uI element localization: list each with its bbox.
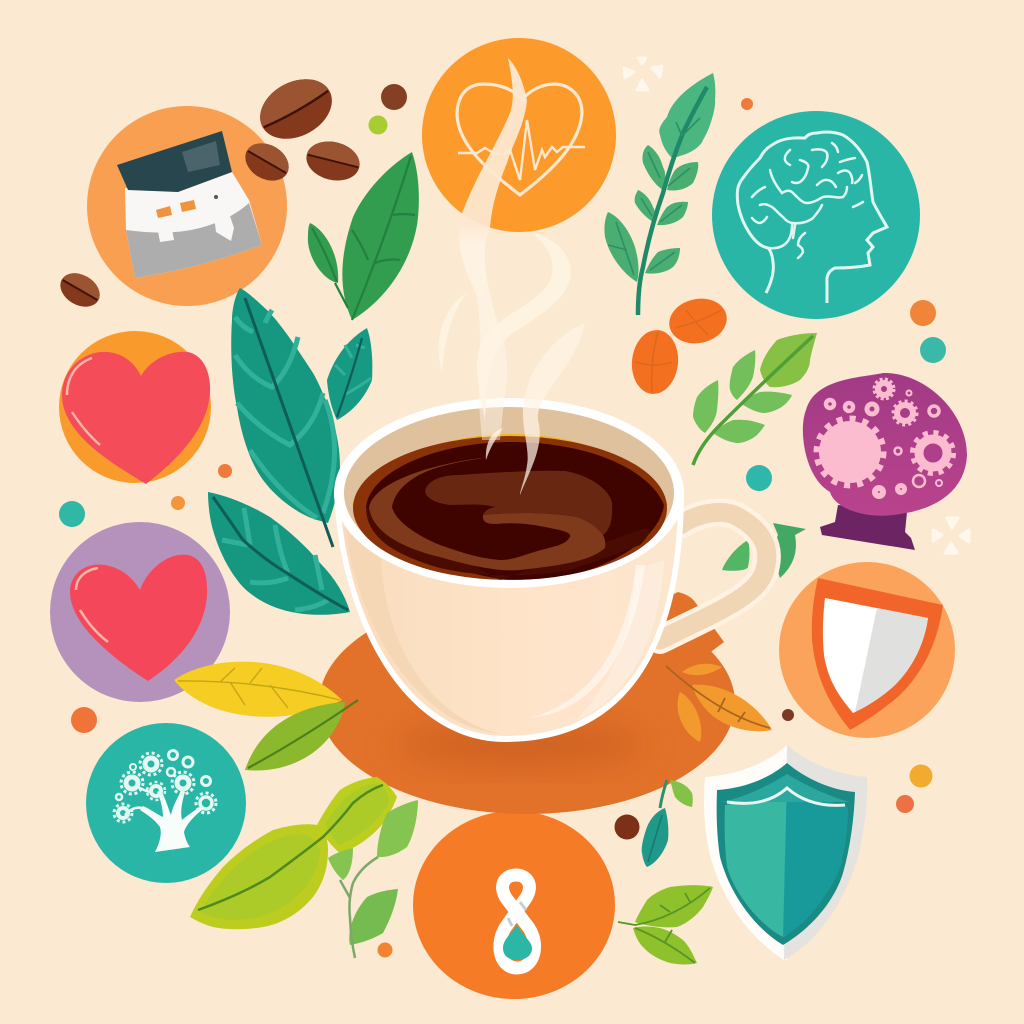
icon: green sprig bottom bbox=[328, 800, 418, 958]
icon: green leaves bottom bbox=[618, 885, 713, 964]
icon: leaf sprig right bbox=[693, 333, 817, 465]
large gear bbox=[817, 419, 883, 485]
icon: sprig with brown dot bbox=[614, 780, 693, 867]
panel: heart on orange circle bbox=[59, 331, 211, 484]
panel: purple brain with gears bbox=[803, 373, 967, 550]
panel: orange circle with infinity drop bbox=[413, 811, 615, 999]
panel: heart rate circle bbox=[422, 38, 616, 232]
steam bbox=[439, 58, 585, 495]
icon: autumn leaves on saucer bbox=[666, 664, 772, 742]
icon: lower teal leaf bbox=[208, 492, 350, 615]
panel: heart on purple circle bbox=[50, 522, 230, 702]
panel: shield circle bbox=[779, 562, 955, 738]
icon: yellow and green leaves bbox=[174, 662, 358, 771]
icon: coffee beans bbox=[54, 67, 407, 313]
panel: coffee bag circle bbox=[87, 106, 287, 306]
icon: sparkle right bbox=[933, 518, 969, 553]
icon: leaf branch top right bbox=[604, 73, 715, 315]
main steam ribbon bbox=[459, 58, 527, 440]
fourth steam ribbon bbox=[520, 323, 585, 495]
cup handle bbox=[660, 512, 767, 640]
icon: sparkle top bbox=[624, 58, 662, 90]
saucer bbox=[319, 592, 735, 814]
icon: small teal leaf bbox=[327, 328, 372, 420]
icon: lime leaves bottom left bbox=[190, 777, 397, 929]
panel: gear tree circle bbox=[86, 723, 246, 883]
small steam wisp bbox=[486, 428, 503, 460]
icon: orange coffee beans bbox=[629, 293, 731, 396]
medium gear bbox=[913, 433, 953, 473]
decorative dots bbox=[59, 98, 946, 813]
second steam ribbon bbox=[477, 232, 571, 420]
icon: hidden leaf behind handle bbox=[722, 523, 806, 578]
icon: green leaves top left bbox=[308, 152, 419, 320]
small gears bbox=[826, 379, 942, 496]
panel: brain profile circle bbox=[712, 111, 920, 319]
icon: big teal leaf bbox=[231, 288, 340, 547]
third steam wisp bbox=[439, 293, 467, 372]
icon: teal shield bbox=[704, 745, 867, 960]
coffee cup bbox=[334, 398, 684, 742]
